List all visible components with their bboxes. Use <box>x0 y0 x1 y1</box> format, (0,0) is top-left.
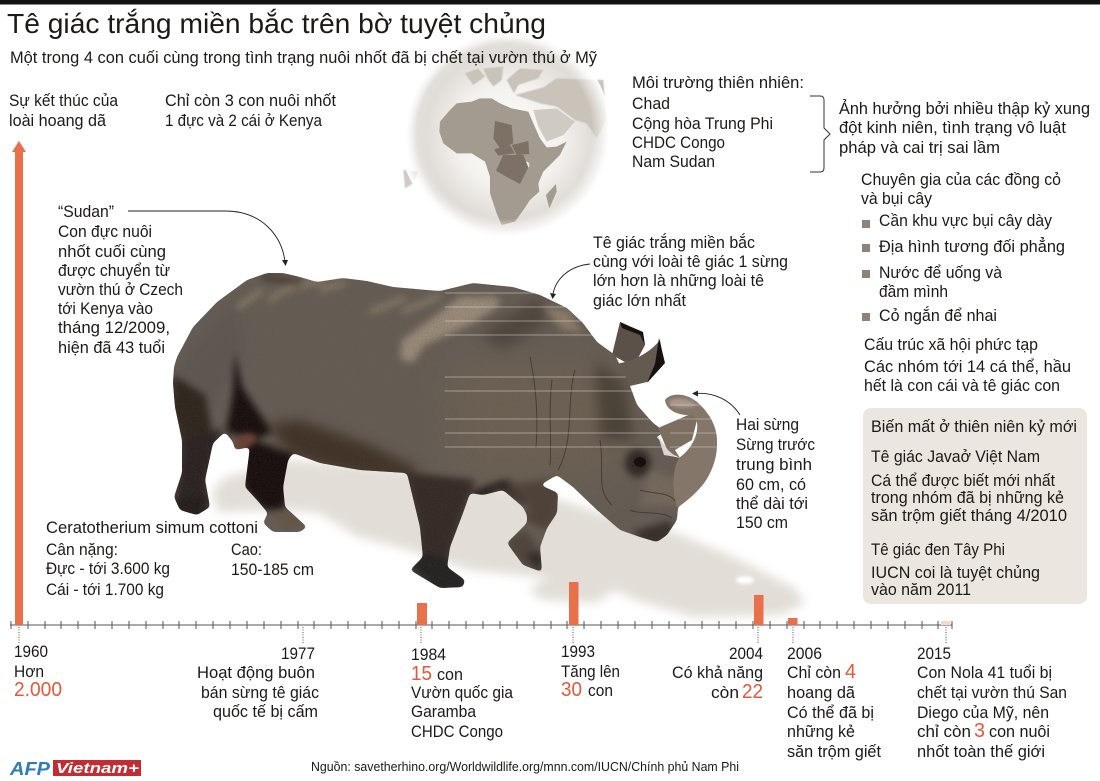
rhino body with shading <box>172 273 700 592</box>
eye dark <box>625 449 651 477</box>
horizontal lines over horn <box>670 405 717 447</box>
panel: disappeared in new millennium: IUCN coi là tuyệt chủng <box>871 564 1040 582</box>
callout: size comparison: giác lớn nhất <box>593 292 686 310</box>
text: species stats: Cao: <box>231 541 262 559</box>
timeline entry: 2006: săn trộm giết <box>787 743 881 761</box>
text: species stats: 150-185 cm <box>231 561 314 579</box>
timeline axis <box>10 621 952 644</box>
panel: disappeared in new millennium: Tê giác đen Tây Phi <box>871 541 1005 559</box>
land: Madagascar <box>546 184 557 208</box>
land: Africa <box>439 98 567 225</box>
callout: Sudan <box>58 203 183 357</box>
bar: 2015 <box>941 621 950 625</box>
shoulder warm tone <box>450 355 650 480</box>
text: end of wild species: loài hoang dã <box>9 112 107 130</box>
lines over body <box>445 292 662 448</box>
timeline entry: 1984: Vườn quốc gia <box>411 684 514 702</box>
highlighted countries: Chad, Central African Republic, South Sudan, DR Congo <box>493 121 529 184</box>
text: social structure: Các nhóm tới 14 cá thể, hầu <box>864 358 1071 376</box>
text: threats: pháp và cai trị sai lầm <box>839 139 1000 157</box>
arrow: Sudan to rhino <box>128 211 288 266</box>
bar: 1993 <box>569 582 578 625</box>
text: species stats: Cái - tới 1.700 kg <box>46 581 164 599</box>
timeline entry: 1977: 1977 <box>281 645 315 663</box>
timeline entry: 2004: còn <box>711 684 739 702</box>
foot of rear leg <box>174 497 208 516</box>
text: natural habitat: Môi trường thiên nhiên: <box>632 74 804 92</box>
bar: 2006 <box>788 618 798 625</box>
callout: Sudan: hiện đã 43 tuổi <box>58 339 165 357</box>
text: social structure <box>864 336 1071 395</box>
hind foot lighter <box>278 510 305 528</box>
bracket <box>810 96 830 172</box>
text: grassland experts list: và bụi cây <box>861 190 933 208</box>
text: grassland experts list: đầm mình <box>879 283 948 301</box>
callout: Sudan: được chuyển từ <box>58 262 170 280</box>
timeline entry: 1993: 30 <box>561 678 582 701</box>
callout: Sudan: “Sudan” <box>58 203 114 221</box>
text: end of wild species <box>9 92 119 130</box>
grain and wrinkles <box>170 270 720 590</box>
timeline entry: 1984: CHDC Congo <box>411 723 503 741</box>
panel: disappeared in new millennium: săn trộm giết tháng 4/2010 <box>871 507 1067 525</box>
timeline entry: 1977 <box>197 645 319 721</box>
text: grassland experts list: Cỏ ngắn để nhai <box>879 306 997 325</box>
panel: disappeared in new millennium: vào năm 2011 <box>871 581 971 599</box>
panel: disappeared in new millennium: trong nhóm đã bị những kẻ <box>871 489 1064 507</box>
callout: two horns: 60 cm, có <box>736 476 806 494</box>
callout: Sudan: tới Kenya vào <box>58 300 153 318</box>
title: Tê giác trắng miền bắc trên bờ tuyệt chủng <box>7 8 546 39</box>
timeline entry: 2006: 2006 <box>787 645 822 663</box>
callout: size comparison: Tê giác trắng miền bắc <box>593 233 755 252</box>
timeline entry: 2015: chỉ còn <box>917 723 971 741</box>
rear leg <box>172 428 222 520</box>
timeline entry: 1960: Hơn <box>14 663 44 681</box>
timeline entry: 2004 <box>672 645 763 703</box>
text: species stats: Đực - tới 3.600 kg <box>46 560 170 578</box>
timeline entry: 2006: 4 <box>845 660 856 683</box>
timeline entry: 2004: 2004 <box>729 645 763 663</box>
hind inner leg <box>243 437 295 510</box>
timeline entry: 2015: 3 <box>974 719 985 742</box>
timeline entry: 1993: con <box>588 682 613 700</box>
callout: two horns <box>736 416 815 532</box>
rhino ears <box>600 322 665 386</box>
text: threats <box>839 99 1090 157</box>
timeline entry: 1960: 1960 <box>14 643 48 661</box>
source: Nguồn: savetherhino.org/Worldwildlife.org/mnn.com/IUCN/Chính phủ Nam Phi <box>311 759 739 774</box>
ground shadow of rhino <box>212 460 805 617</box>
text: natural habitat: Cộng hòa Trung Phi <box>632 115 773 133</box>
text: social structure: hết là con cái và tê giác con <box>864 377 1060 395</box>
timeline entry: 2004: 22 <box>742 680 763 703</box>
bar: 2004 <box>754 595 764 625</box>
text: natural habitat: Chad <box>632 95 670 113</box>
sheath <box>231 430 259 452</box>
callout: two horns: Sừng trước <box>736 436 815 454</box>
rear dark <box>172 375 212 445</box>
text: grassland experts list <box>861 171 1065 325</box>
text: threats: Ảnh hưởng bởi nhiều thập kỷ xung <box>839 99 1090 118</box>
rear horn and white gap <box>657 412 698 458</box>
timeline entry: 2006 <box>787 645 881 761</box>
callout: Sudan: vườn thú ở Czech <box>58 281 183 299</box>
text: end of wild species: Sự kết thúc của <box>9 92 119 110</box>
timeline entry: 2015 <box>917 645 1067 761</box>
logo: Vietnam+: Vietnam+ <box>56 760 139 777</box>
text: species stats <box>46 519 314 599</box>
timeline entry: 1977: bán sừng tê giác <box>201 684 319 702</box>
logo: AFP: AFP <box>9 759 51 779</box>
text: grassland experts list: Cần khu vực bụi cây dày <box>879 212 1053 230</box>
timeline entry: 1984: Garamba <box>411 703 477 721</box>
callout: two horns: Hai sừng <box>736 416 799 434</box>
bar: 1984 <box>417 603 427 625</box>
front horn <box>665 395 717 508</box>
timeline entry: 2006: Có thể đã bị <box>787 704 874 722</box>
timeline entry: 1960 <box>14 643 62 701</box>
rump tone <box>173 349 182 410</box>
land: Arabia <box>533 108 575 142</box>
timeline entry: 1984: con <box>437 666 463 684</box>
text: three captive left <box>165 92 336 130</box>
timeline entry: 1993: Tăng lên <box>561 663 620 681</box>
top black bar <box>0 0 1100 4</box>
timeline entry: 2006: Chỉ còn <box>787 664 841 682</box>
timeline entry: 2015: 2015 <box>917 645 951 663</box>
globe map of Africa <box>399 26 611 238</box>
timeline entry: 1977: quốc tế bị cấm <box>213 703 318 721</box>
land: South America edge <box>403 170 418 188</box>
text: natural habitat: Nam Sudan <box>632 153 715 171</box>
timeline entry: 1993: 1993 <box>561 643 595 661</box>
timeline entry: 1984 <box>411 646 514 741</box>
eye <box>634 457 646 467</box>
text: natural habitat <box>632 74 804 171</box>
callout: size comparison <box>593 233 788 310</box>
text: grassland experts list: Chuyên gia của các đồng cỏ <box>861 171 1061 189</box>
head tones <box>642 470 676 505</box>
timeline entry: 2006: hoang dã <box>787 684 856 702</box>
panel: disappeared in new millennium: Biến mất ở thiên niên kỷ mới <box>871 418 1077 436</box>
neck shade <box>595 360 635 440</box>
text: three captive left: Chỉ còn 3 con nuôi nhốt <box>165 92 336 110</box>
callout: size comparison: lớn hơn là những loài tê <box>593 272 764 290</box>
timeline entry: 2015: chết tại vườn thú San <box>917 684 1067 702</box>
light patches <box>400 297 500 363</box>
callout: size comparison: cùng với loài tê giác 1 sừng <box>593 253 788 271</box>
front leg <box>405 472 475 560</box>
timeline entry: 2015: nhốt toàn thế giới <box>917 743 1045 761</box>
nose dark <box>632 520 672 546</box>
timeline entry: 1984: 1984 <box>411 646 446 664</box>
crease <box>226 353 272 440</box>
text: threats: đột kinh niên, tình trạng vô luật <box>839 119 1066 137</box>
text: natural habitat: CHDC Congo <box>632 134 725 152</box>
land: Europe and Middle East <box>465 67 607 138</box>
upper shoulder dark band <box>480 296 548 350</box>
timeline entry: 2006: những kẻ <box>787 723 855 741</box>
callout: Sudan: nhốt cuối cùng <box>58 243 166 261</box>
timeline entry: 2015: con nuôi <box>989 723 1050 741</box>
text: grassland experts list: Nước để uống và <box>879 264 1003 282</box>
text: species stats: Cân nặng: <box>46 541 118 559</box>
chest dark <box>470 480 535 505</box>
callout: two horns: thể dài tới <box>736 495 808 513</box>
callout: two horns: trung bình <box>736 456 812 474</box>
text: three captive left: 1 đực và 2 cái ở Kenya <box>165 112 323 130</box>
timeline entry: 2015: Diego của Mỹ, nên <box>917 704 1049 722</box>
belly brown <box>268 420 420 482</box>
back streaks <box>237 280 440 312</box>
timeline entry: 1993 <box>561 643 620 701</box>
lake <box>524 162 529 168</box>
text: species stats: Ceratotherium simum cottoni <box>46 519 258 537</box>
text: grassland experts list: Địa hình tương đối phẳng <box>879 237 1065 256</box>
timeline entry: 1977: Hoạt động buôn <box>197 664 315 682</box>
timeline entry: 2004: Có khả năng <box>672 664 763 682</box>
callout: two horns: 150 cm <box>736 514 788 532</box>
panel: disappeared in new millennium: Cá thể được biết mới nhất <box>871 472 1055 490</box>
lifted foreleg <box>505 478 560 530</box>
arrow: horns <box>692 390 740 415</box>
callout: Sudan: tháng 12/2009, <box>58 319 170 337</box>
text: social structure: Cấu trúc xã hội phức tạp <box>864 336 1038 354</box>
timeline entry: 1984: 15 <box>411 662 432 685</box>
panel: disappeared in new millennium: Tê giác Javaở Việt Nam <box>871 448 1040 466</box>
bar with arrow: 1960 <box>12 141 26 625</box>
arrow: size comparison to rhino <box>550 264 590 299</box>
callout: Sudan: Con đực nuôi <box>58 223 152 241</box>
timeline entry: 2015: Con Nola 41 tuổi bị <box>917 664 1052 682</box>
rhino illustration <box>170 270 720 592</box>
subtitle: Một trong 4 con cuối cùng trong tình trạng nuôi nhốt đã bị chết tại vườn thú ở Mỹ <box>10 49 598 67</box>
timeline entry: 1960: 2.000 <box>14 678 62 701</box>
panel: disappeared in new millennium <box>863 408 1087 604</box>
